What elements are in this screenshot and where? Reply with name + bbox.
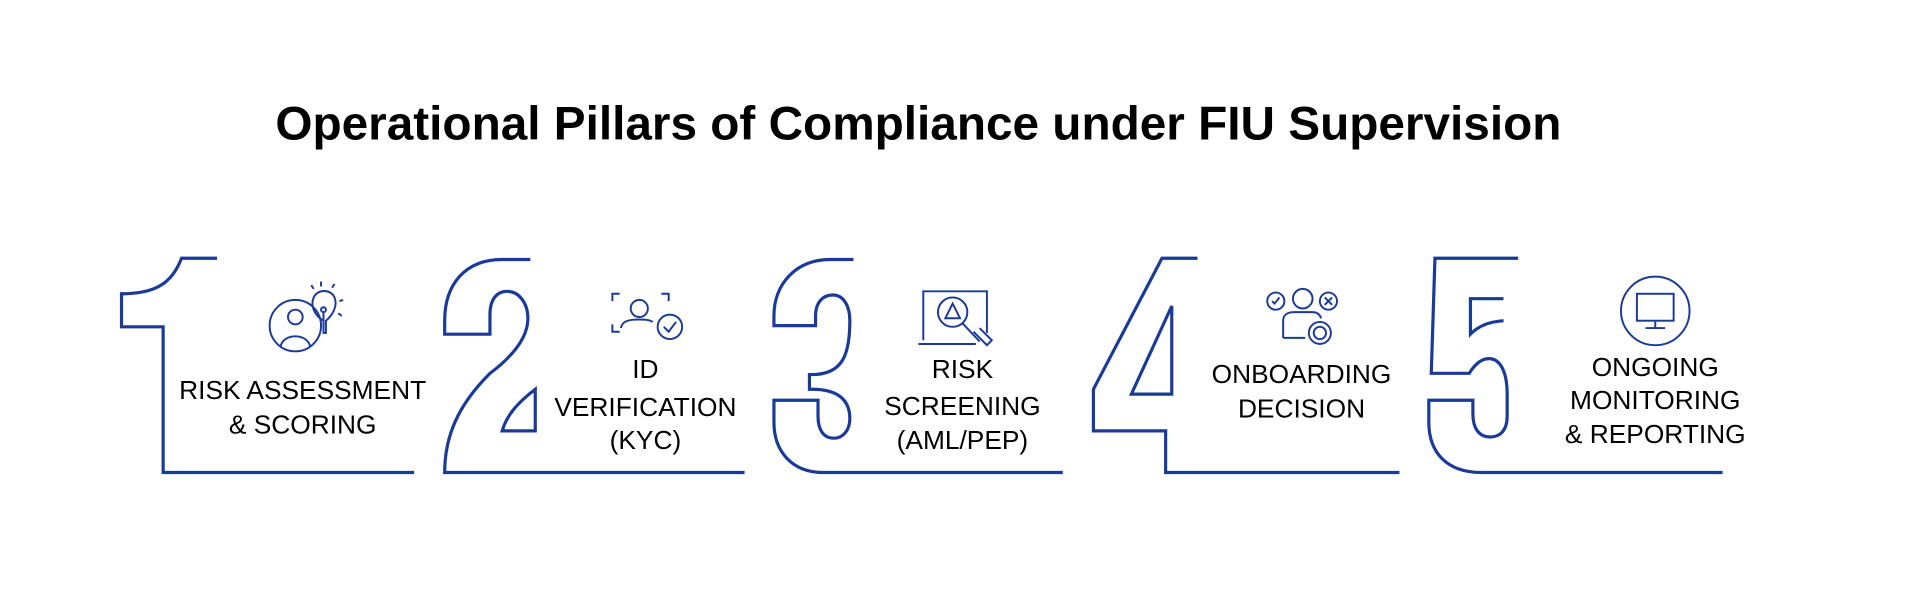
panel: step 3: SCREENING — [884, 391, 1041, 421]
icon: screen with magnifier warning — [918, 291, 992, 345]
numeral 3 outline — [774, 260, 1063, 472]
numeral 2 outline — [445, 260, 745, 472]
label: RISK — [932, 354, 994, 384]
numeral 1 outline — [122, 258, 414, 472]
label: RISK ASSESSMENT — [179, 375, 426, 405]
panel: step 5: MONITORING — [1570, 385, 1740, 415]
panel: step 1 — [122, 258, 426, 472]
label: ONGOING — [1592, 352, 1719, 382]
icon: ID verification — [612, 294, 682, 339]
panel: step 3 — [774, 260, 1063, 472]
icon: onboarding decision — [1267, 289, 1337, 344]
panel: step 2: (KYC) — [610, 425, 681, 455]
numeral 4 outline — [1093, 258, 1399, 472]
panel: step 3: (AML/PEP) — [897, 425, 1028, 455]
icon: monitor in circle — [1621, 277, 1690, 345]
panel: step 4 — [1093, 258, 1399, 472]
icon: person with lightbulb — [270, 282, 343, 351]
title: Operational Pillars of Compliance under FIU Supervision — [275, 98, 1561, 151]
label: ID — [632, 354, 659, 384]
panel: step 5: & REPORTING — [1565, 419, 1746, 449]
panel: step 2 — [445, 260, 745, 472]
panel: step 1: & SCORING — [229, 409, 376, 439]
panel: step 5 — [1429, 258, 1746, 472]
label: ONBOARDING — [1212, 359, 1391, 389]
panel: step 2: VERIFICATION — [554, 392, 736, 422]
panel: step 4: DECISION — [1238, 393, 1365, 423]
numeral 5 outline — [1429, 258, 1723, 472]
